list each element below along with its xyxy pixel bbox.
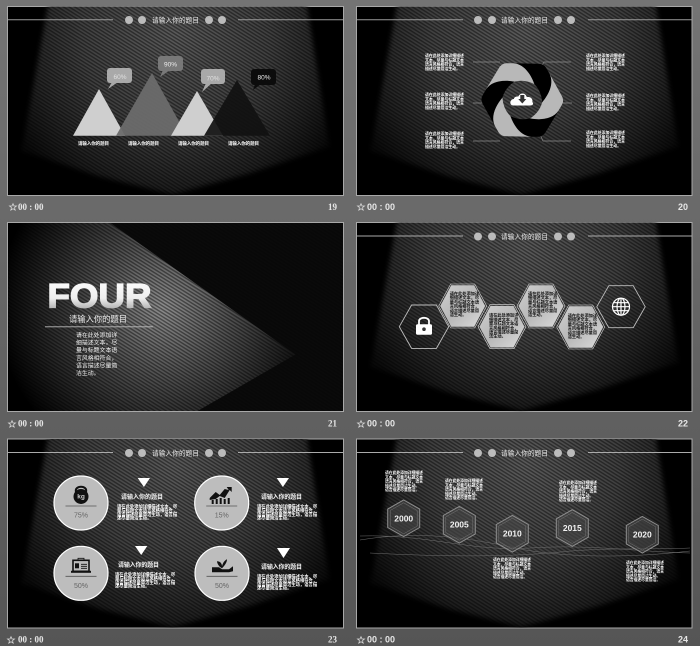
text hexagon 4: 言风格相符合， [568, 325, 597, 332]
triangle labels: 请输入你的题目 [178, 140, 209, 147]
text hexagon 1: 量与标题文本语 [450, 298, 480, 305]
slide 22 footer: 22 [678, 418, 688, 428]
headings: 请输入你的题目 [118, 561, 159, 569]
headings: 请输入你的题目 [261, 493, 302, 501]
circle: kettlebell 75%: 75% [74, 512, 88, 520]
slide 19 footer [10, 202, 338, 212]
right text blocks: 描述尽量简洁生动。 [586, 106, 621, 111]
text hexagon 4: 洁生动。 [568, 333, 584, 340]
text hexagon 3: 语言描述尽量简 [528, 307, 557, 314]
text hexagon 4: 细描述文本，尽 [568, 316, 598, 323]
hexagon 2015 [556, 510, 588, 546]
descriptions: 请在此处添加详细描述文本，尽 [117, 503, 178, 510]
arrows: down triangles [135, 478, 290, 558]
panel: slide 20 pinwheel [356, 6, 692, 196]
headings [118, 493, 302, 571]
left text blocks: 语言风格相符合，语言 [425, 101, 464, 106]
bubble 80% [251, 69, 276, 90]
slide 20 footer [358, 202, 688, 212]
triangle labels [78, 140, 259, 147]
hexagon 2010: 2010 [503, 529, 522, 539]
timeline text blocks: 语言风格相符合，语言 [445, 487, 483, 492]
text hexagon 3: 请在此处添加详 [528, 290, 558, 297]
right text blocks: 请在此处添加详细描述 [586, 93, 625, 98]
descriptions: 述尽量简洁生动。 [117, 515, 151, 522]
timeline text blocks: 文本，尽量与标题文本 [493, 561, 531, 566]
descriptions: 语言描述尽量简洁生动，语言描 [115, 579, 176, 586]
left text blocks [425, 53, 464, 149]
slide 20 footer: 20 [678, 202, 688, 212]
slide 24 footer: 00 : 00 [367, 634, 395, 644]
panel: slide 23 four circles [8, 439, 344, 628]
slide 23 footer [8, 634, 338, 644]
right text blocks: 请在此处添加详细描述 [586, 53, 625, 58]
bubble 80%: 80% [257, 74, 271, 82]
timeline text blocks: 请在此处添加详细描述 [445, 478, 483, 483]
descriptions: 请在此处添加详细描述文本，尽 [115, 571, 176, 578]
subtitle: 请输入你的题目 [69, 314, 127, 324]
slide 22 footer [358, 418, 688, 428]
connector lines [473, 62, 572, 141]
lit diagonal wedge [8, 223, 296, 411]
bubble 90% [158, 56, 183, 77]
headings: 请输入你的题目 [121, 493, 163, 501]
left text blocks: 语言风格相符合，语言 [425, 62, 464, 67]
text hexagon 2: 言风格相符合， [489, 324, 518, 331]
body text: 言风格相符合， [76, 354, 117, 362]
circle: id card 50%: 50% [74, 583, 88, 590]
hexagon 2020: 2020 [633, 530, 652, 540]
slide 19 header [8, 15, 343, 24]
descriptions: 述尽量简洁生动。 [257, 515, 291, 522]
text hexagon 2: 细描述文本，尽 [489, 316, 519, 323]
triangle labels: 请输入你的题目 [78, 140, 109, 147]
hexagon 2020 [626, 516, 658, 553]
text hexagon 1: 细描述文本，尽 [450, 294, 480, 301]
slide 19 header: 请输入你的题目 [152, 15, 199, 24]
right text blocks: 语言风格相符合，语言 [586, 62, 625, 67]
right text blocks: 文本，尽量与标题文本 [586, 57, 625, 62]
descriptions: 量与标题文本语言风格相符合， [117, 507, 177, 514]
timeline text blocks: 文本，尽量与标题文本 [559, 484, 597, 489]
descriptions: 量与标题文本语言风格相符合， [115, 575, 175, 582]
right text blocks: 文本，尽量与标题文本 [586, 134, 625, 139]
left text blocks: 文本，尽量与标题文本 [425, 135, 464, 140]
hexagon 2005 [443, 506, 475, 543]
timeline text blocks: 描述尽量简洁生动。 [559, 493, 593, 498]
slide 22 header: 请输入你的题目 [501, 232, 548, 241]
icon hexagon: lock [399, 305, 449, 348]
bubble 60%: 60% [113, 74, 127, 81]
descriptions [115, 503, 318, 592]
slide 23 footer: 00 : 00 [18, 634, 44, 644]
text hexagon 2: 量与标题文本语 [489, 320, 519, 327]
panel: slide 19 triangle percentages [8, 6, 344, 196]
text hexagon 3: 洁生动。 [528, 311, 545, 318]
left text blocks: 请在此处添加详细描述 [425, 53, 464, 58]
hexagon 2010 [496, 515, 528, 552]
timeline text blocks: 描述尽量简洁生动。 [493, 570, 527, 575]
timeline text blocks: 文本，尽量与标题文本 [626, 564, 664, 569]
slide 23 footer: 23 [328, 634, 338, 644]
triangle chart [73, 56, 276, 147]
triangle labels: 请输入你的题目 [128, 140, 159, 147]
timeline text blocks: 请在此处添加详细描述 [626, 560, 664, 565]
bubble 70%: 70% [206, 76, 220, 82]
left text blocks: 文本，尽量与标题文本 [425, 57, 464, 62]
slide 21 footer [8, 418, 338, 428]
timeline text blocks: 描述尽量简洁生动。 [445, 491, 479, 496]
text hexagon 1: 言风格相符合， [450, 303, 479, 310]
text hexagon 4: 语言描述尽量简 [568, 329, 597, 336]
text hexagon 4: 请在此处添加详 [568, 312, 598, 319]
hexagon 2015: 2015 [563, 523, 582, 533]
timeline text blocks: 请在此处添加详细描述 [385, 470, 423, 475]
text hexagon 4: 量与标题文本语 [568, 320, 598, 327]
timeline text blocks: 请在此处添加详细描述 [559, 480, 597, 485]
timeline text blocks: 描述尽量简洁生动。 [626, 573, 660, 578]
circle: rising chart 15%: 15% [215, 512, 229, 520]
circle: hand with sprout 50% [195, 546, 249, 600]
text hexagon 3: 量与标题文本语 [528, 298, 558, 305]
slide 23 header: 请输入你的题目 [152, 448, 199, 457]
descriptions: 请在此处添加详细描述文本，尽 [257, 573, 318, 580]
circle: rising chart 15% [195, 476, 249, 530]
descriptions: 量与标题文本语言风格相符合， [257, 507, 317, 514]
body text: 语言描述尽量简 [76, 361, 117, 369]
panel: slide 24 timeline [356, 439, 692, 628]
timeline text blocks: 描述尽量简洁生动。 [385, 483, 419, 488]
hexagon 2000 [388, 500, 420, 537]
slide 20 footer: 00 : 00 [367, 202, 395, 212]
descriptions: 请在此处添加详细描述文本，尽 [257, 503, 318, 510]
descriptions: 语言描述尽量简洁生动，语言描 [257, 511, 318, 518]
descriptions: 语言描述尽量简洁生动，语言描 [257, 581, 318, 588]
text hexagon 2: 语言描述尽量简 [489, 329, 518, 336]
left text blocks: 文本，尽量与标题文本 [425, 96, 464, 101]
panel: slide 22 hexagon row [356, 222, 692, 412]
right text blocks [586, 53, 625, 148]
panel: slide 21 section cover FOUR [8, 222, 344, 412]
timeline text blocks: 文本，尽量与标题文本 [385, 474, 423, 479]
descriptions: 量与标题文本语言风格相符合， [257, 577, 317, 584]
left text blocks: 语言风格相符合，语言 [425, 140, 464, 145]
slide 22 footer: 00 : 00 [367, 418, 395, 428]
right text blocks: 描述尽量简洁生动。 [586, 66, 621, 71]
body text: 细描述文本，尽 [76, 339, 117, 347]
timeline text blocks: 文本，尽量与标题文本 [445, 482, 483, 487]
body text: 请在此处添加详 [76, 331, 117, 339]
descriptions: 述尽量简洁生动。 [257, 585, 291, 592]
text hexagon 2: 请在此处添加详 [489, 312, 519, 319]
text hexagon 2: 洁生动。 [489, 333, 506, 340]
text hexagon 3: 言风格相符合， [528, 303, 557, 310]
timeline text blocks: 语言描述尽量简洁。 [445, 495, 479, 500]
slide 24 header: 请输入你的题目 [501, 448, 548, 457]
slide 20 header [357, 15, 692, 24]
timeline text blocks: 语言描述尽量简洁。 [493, 574, 527, 579]
body text: 洁生动。 [76, 369, 100, 377]
hexagon 2005: 2005 [450, 520, 469, 530]
triangle labels: 请输入你的题目 [228, 140, 259, 147]
slide 19 footer: 00 : 00 [18, 202, 44, 212]
text hexagon 3 [517, 284, 565, 328]
big title FOUR: FOUR [48, 278, 152, 316]
left text blocks: 请在此处添加详细描述 [425, 131, 464, 136]
timeline text blocks: 语言风格相符合，语言 [385, 479, 423, 484]
slide 19 footer: 19 [328, 202, 338, 212]
slide 20 header: 请输入你的题目 [501, 15, 548, 24]
wave lines [360, 535, 690, 556]
circle: id card 50% [54, 546, 108, 600]
timeline text blocks [385, 470, 664, 582]
text hexagon 1 [439, 284, 487, 328]
right text blocks: 请在此处添加详细描述 [586, 130, 625, 135]
slide 23 header [8, 448, 343, 457]
right text blocks: 语言风格相符合，语言 [586, 102, 625, 107]
right text blocks: 文本，尽量与标题文本 [586, 97, 625, 102]
pinwheel diagram [472, 50, 572, 150]
slide 21 footer: 00 : 00 [18, 418, 44, 428]
timeline text blocks: 语言风格相符合，语言 [626, 569, 664, 574]
text hexagon 1: 洁生动。 [450, 311, 466, 318]
timeline text blocks: 语言描述尽量简洁。 [626, 577, 660, 582]
text hexagon 2 [478, 305, 526, 349]
timeline text blocks: 语言描述尽量简洁。 [559, 497, 593, 502]
timeline text blocks: 请在此处添加详细描述 [493, 557, 531, 562]
circle: kettlebell 75%: kg [77, 494, 85, 500]
slide 24 header [357, 448, 692, 457]
slide 24 footer [358, 634, 688, 644]
left text blocks: 描述尽量简洁生动。 [425, 66, 460, 71]
slide 22 header [357, 232, 692, 241]
text hexagon 4 [557, 305, 605, 349]
timeline text blocks: 语言风格相符合，语言 [559, 489, 597, 494]
slide 21 footer: 21 [328, 418, 338, 428]
headings: 请输入你的题目 [261, 563, 302, 571]
slide 24 footer: 24 [678, 634, 688, 644]
icon: cloud download [510, 94, 533, 106]
descriptions: 语言描述尽量简洁生动，语言描 [117, 511, 178, 518]
icon hexagon: globe [597, 286, 645, 328]
right text blocks: 语言风格相符合，语言 [586, 139, 625, 144]
left text blocks: 描述尽量简洁生动。 [425, 144, 460, 149]
bubble 70% [201, 69, 225, 92]
hexagon chain [399, 284, 645, 349]
timeline text blocks: 语言风格相符合，语言 [493, 566, 531, 571]
body text: 量与标题文本语 [76, 346, 117, 354]
text hexagon 3: 细描述文本，尽 [528, 294, 558, 301]
bubble 90%: 90% [164, 62, 177, 68]
timeline text blocks: 语言描述尽量简洁。 [385, 487, 419, 492]
right text blocks: 描述尽量简洁生动。 [586, 143, 621, 148]
circle: hand with sprout 50%: 50% [215, 583, 229, 590]
left text blocks: 描述尽量简洁生动。 [425, 105, 460, 110]
bubble 60% [107, 68, 132, 89]
circle: kettlebell 75% [54, 476, 108, 530]
hexagon 2000: 2000 [394, 513, 413, 523]
descriptions: 述尽量简洁生动。 [115, 583, 149, 590]
text hexagon 1: 请在此处添加详 [450, 290, 480, 297]
left text blocks: 请在此处添加详细描述 [425, 92, 464, 97]
text hexagon 1: 语言描述尽量简 [450, 307, 479, 314]
